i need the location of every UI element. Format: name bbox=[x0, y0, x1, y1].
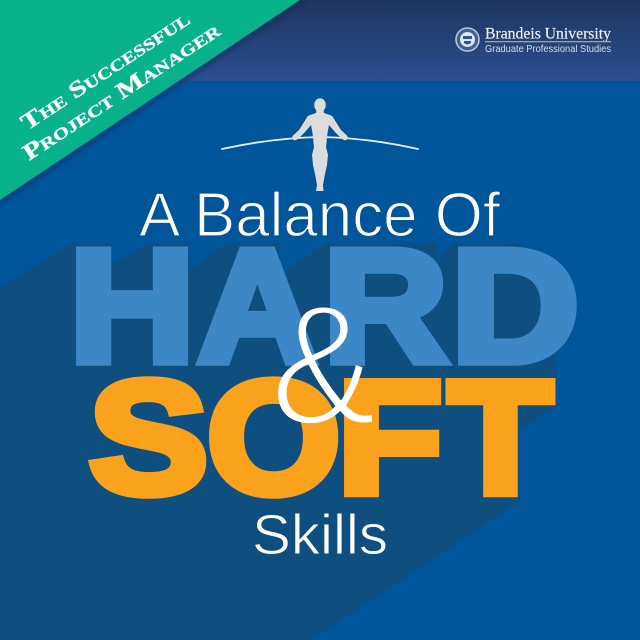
heading: SOFT: T bbox=[449, 348, 552, 526]
header band bbox=[0, 0, 640, 81]
heading: A Balance Of: A Balance Of bbox=[139, 181, 501, 250]
banner shadow bbox=[0, 0, 308, 205]
figure bbox=[292, 98, 348, 191]
heading: HARD: D bbox=[451, 217, 579, 395]
ampersand: & bbox=[270, 270, 377, 461]
university logo bbox=[456, 26, 611, 55]
heading: HARD: H bbox=[70, 217, 195, 396]
heading: SOFT: S bbox=[89, 348, 208, 526]
heading: HARD bbox=[70, 217, 579, 396]
green banner bbox=[0, 0, 300, 200]
heading: Skills: Skills bbox=[252, 503, 388, 567]
heading: SOFT: F bbox=[338, 349, 442, 527]
balance pole bbox=[222, 137, 418, 149]
university name: Brandeis University bbox=[485, 26, 611, 42]
icon: tightrope walker bbox=[222, 98, 418, 191]
heading: SOFT bbox=[89, 348, 552, 527]
heading: HARD: R bbox=[324, 217, 447, 396]
gold rule bbox=[485, 41, 611, 42]
icon: university seal bbox=[456, 28, 479, 51]
heading: HARD: A bbox=[198, 217, 317, 395]
banner title line 1: The Successful bbox=[16, 6, 194, 135]
banner title line 2: Project Manager bbox=[18, 17, 225, 165]
heading: SOFT: O bbox=[207, 349, 340, 527]
long shadow behind letters bbox=[0, 243, 560, 640]
department name: Graduate Professional Studies bbox=[485, 43, 611, 55]
